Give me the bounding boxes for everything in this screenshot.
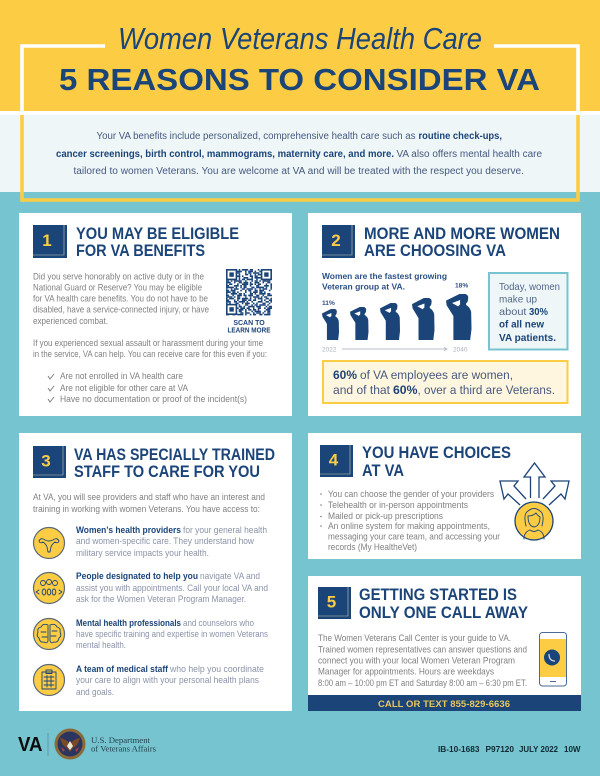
heading 4: AT VA bbox=[362, 461, 404, 480]
intro text: cancer screenings, birth control, mammograms, maternity care, and more. bbox=[56, 149, 394, 160]
sexual assault paragraph bbox=[33, 338, 267, 359]
number badge 4 bbox=[320, 445, 353, 477]
text: who help you coordinate bbox=[169, 663, 264, 674]
call center paragraph: connect you with your local Women Veteran Program bbox=[318, 656, 515, 666]
callout: 30% of new patients: 30% bbox=[529, 307, 548, 318]
title line: 5 Reasons to Consider VA: 5 REASONS TO CONSIDER VA bbox=[59, 62, 540, 97]
call center paragraph: The Women Veterans Call Center is your guide to VA. bbox=[318, 633, 511, 643]
callout: 30% of new patients: Today, women bbox=[499, 282, 560, 293]
text: ask for the Women Veteran Program Manager. bbox=[76, 593, 246, 604]
text: navigate VA and bbox=[200, 570, 260, 581]
icon: phone bbox=[540, 632, 566, 686]
panel 2: more women choosing VA bbox=[308, 213, 581, 416]
chart heading bbox=[322, 271, 447, 292]
staff intro text bbox=[33, 492, 265, 514]
footer: VA logo bbox=[18, 728, 156, 760]
heading 4: YOU HAVE CHOICES bbox=[362, 443, 511, 462]
eligibility paragraph: National Guard or Reserve? You may be eligible bbox=[33, 282, 202, 292]
call bar bbox=[308, 695, 581, 711]
text: military service impacts your health. bbox=[76, 547, 209, 558]
woman avatar bbox=[515, 502, 553, 540]
heading 1 bbox=[76, 224, 239, 260]
bullet list: An online system for making appointments, bbox=[328, 521, 490, 531]
department name: of Veterans Affairs bbox=[91, 744, 156, 754]
panel 4: choices at VA bbox=[308, 433, 581, 559]
number badge 3 bbox=[33, 446, 66, 478]
text: assist you with appointments. Call your local VA and bbox=[76, 582, 268, 593]
label 11%: 11% bbox=[322, 300, 335, 307]
department name: U.S. Department bbox=[91, 735, 151, 745]
intro text: routine check-ups, bbox=[418, 131, 502, 142]
panel 5: getting started bbox=[308, 576, 581, 711]
callout: 60% of employees: 60% bbox=[333, 368, 357, 382]
text: have specific training and expertise in women Veterans bbox=[76, 628, 268, 639]
heading 1: YOU MAY BE ELIGIBLE bbox=[76, 224, 239, 243]
arrows bbox=[500, 463, 569, 505]
callout: 60% of employees: of VA employees are women, bbox=[360, 368, 513, 382]
text: Mental health professionals bbox=[76, 617, 181, 628]
department seal bbox=[54, 728, 86, 760]
callout: 60% of employees: and of that bbox=[333, 383, 391, 397]
axis start year: 2022 bbox=[322, 346, 337, 354]
heading 3: VA HAS SPECIALLY TRAINED bbox=[74, 445, 275, 464]
number badge 5 bbox=[318, 587, 351, 619]
frame: yellow lower part bbox=[22, 115, 578, 200]
callout: 30% of new patients: VA patients. bbox=[499, 333, 556, 344]
bullet list bbox=[320, 489, 500, 552]
footer: publication code: 10W bbox=[564, 745, 581, 754]
text: your care to align with your personal health plans bbox=[76, 674, 259, 685]
footer: publication code: JULY 2022 bbox=[519, 745, 559, 754]
callout: 30% of new patients: about bbox=[499, 307, 527, 318]
callout: 30% of new patients: make up bbox=[499, 295, 537, 306]
call center paragraph: Trained women representatives can answer questions and bbox=[318, 644, 527, 654]
staff intro text: At VA, you will see providers and staff who have an interest and bbox=[33, 492, 265, 502]
eligibility paragraph: experienced combat. bbox=[33, 316, 108, 326]
text: and counselors who bbox=[183, 617, 254, 628]
item: people designated to help bbox=[34, 570, 268, 604]
title line: Women Veterans Health Care: Women Veterans Health Care bbox=[118, 21, 482, 56]
checklist: Are not enrolled in VA health care bbox=[60, 371, 183, 381]
number badge 1: 1 bbox=[42, 231, 52, 250]
call center paragraph: 8:00 am – 10:00 pm ET and Saturday 8:00 am – 6:30 pm ET. bbox=[318, 678, 527, 688]
intro text bbox=[56, 131, 542, 177]
frame: white upper part bbox=[22, 46, 578, 113]
QR caption: LEARN MORE bbox=[228, 328, 271, 334]
call center paragraph: Manager for appointments. Hours are weekdays bbox=[318, 666, 494, 676]
icon: people bbox=[34, 572, 64, 604]
heading 4 bbox=[362, 443, 511, 480]
heading 5: GETTING STARTED IS bbox=[359, 585, 517, 604]
heading 2: ARE CHOOSING VA bbox=[364, 241, 506, 260]
heading 1: FOR VA BENEFITS bbox=[76, 241, 205, 260]
intro text: tailored to women Veterans. You are welcome at VA and will be treated with the respect you deserve. bbox=[74, 166, 524, 177]
call bar: CALL OR TEXT 855-829-6636 bbox=[378, 699, 510, 710]
panel 3: specially trained staff bbox=[19, 433, 292, 711]
QR code bbox=[226, 270, 272, 315]
icon: uterus bbox=[34, 528, 64, 558]
bullet list: messaging your care team, and accessing your bbox=[328, 532, 500, 542]
callout: 30% of new patients: of all new bbox=[499, 320, 545, 331]
text bbox=[76, 524, 267, 558]
number badge 3: 3 bbox=[41, 452, 51, 470]
chart heading: Veteran group at VA. bbox=[322, 282, 405, 292]
eligibility paragraph: for VA health care benefits. You do not have to be bbox=[33, 294, 208, 304]
item: women's health providers bbox=[34, 524, 267, 558]
icon: brain bbox=[34, 618, 64, 650]
text bbox=[76, 570, 268, 604]
number badge 2 bbox=[322, 225, 355, 258]
department name bbox=[91, 735, 156, 754]
eligibility paragraph: Did you serve honorably on active duty or in the bbox=[33, 272, 204, 282]
heading 2: MORE AND MORE WOMEN bbox=[364, 224, 560, 243]
intro band: pale bbox=[0, 111, 600, 192]
number badge 1 bbox=[33, 225, 67, 258]
header divider: white bbox=[0, 111, 600, 115]
item: team of medical staff bbox=[34, 663, 264, 697]
text bbox=[76, 663, 264, 697]
VA wordmark: VA bbox=[18, 734, 42, 756]
heading 5: ONLY ONE CALL AWAY bbox=[359, 603, 528, 622]
number badge 4: 4 bbox=[329, 450, 339, 470]
checklist: Have no documentation or proof of the incident(s) bbox=[60, 394, 247, 404]
bullet list: records (My HealtheVet) bbox=[328, 542, 417, 552]
call center paragraph bbox=[318, 633, 527, 688]
text: and goals. bbox=[76, 686, 114, 697]
icon: choice arrows and woman bbox=[500, 463, 569, 540]
heading 3: STAFF TO CARE FOR YOU bbox=[74, 462, 260, 481]
logo divider bbox=[47, 733, 49, 756]
text: People designated to help you bbox=[76, 570, 198, 581]
eligibility paragraph bbox=[33, 272, 209, 326]
icon: clipboard bbox=[34, 664, 64, 696]
bullet list: You can choose the gender of your providers bbox=[328, 489, 494, 499]
callout: 60% of employees bbox=[323, 361, 568, 403]
bullet list: Telehealth or in-person appointments bbox=[328, 500, 468, 510]
axis arrow bbox=[342, 347, 447, 351]
intro text: Your VA benefits include personalized, comprehensive health care such as bbox=[96, 131, 416, 142]
sexual assault paragraph: in the service, VA can help. You can receive care for this even if you: bbox=[33, 349, 267, 359]
axis end year: 2040 bbox=[453, 346, 468, 354]
header band: yellow bbox=[0, 0, 600, 111]
QR caption: SCAN TO bbox=[233, 320, 265, 327]
number badge 5: 5 bbox=[327, 592, 336, 612]
text: and women-specific care. They understand how bbox=[76, 535, 254, 546]
heading 5 bbox=[359, 585, 528, 622]
label 18%: 18% bbox=[455, 282, 468, 290]
number badge 2: 2 bbox=[331, 231, 341, 250]
item: mental health professionals bbox=[34, 617, 268, 650]
footer: publication code bbox=[438, 745, 581, 754]
text: A team of medical staff bbox=[76, 663, 169, 674]
footer: publication code: IB-10-1683 bbox=[438, 745, 480, 754]
footer: publication code: P97120 bbox=[486, 745, 515, 754]
text: Women’s health providers bbox=[76, 524, 181, 535]
eligibility paragraph: disabled, have a service-connected injury, or have bbox=[33, 304, 209, 314]
checklist: Are not eligible for other care at VA bbox=[60, 383, 189, 393]
title bbox=[59, 21, 540, 97]
text bbox=[76, 617, 268, 650]
callout: 60% of employees: 60% bbox=[393, 383, 418, 397]
QR caption bbox=[228, 320, 271, 334]
text: for your general health bbox=[183, 524, 267, 535]
panel 1: eligibility bbox=[19, 213, 292, 416]
chart: saluting silhouettes 2022 to 2040 bbox=[322, 282, 472, 354]
callout: 60% of employees: , over a third are Veterans. bbox=[418, 383, 555, 397]
chart heading: Women are the fastest growing bbox=[322, 271, 447, 281]
heading 2 bbox=[364, 224, 560, 260]
bullet list: Mailed or pick-up prescriptions bbox=[328, 511, 443, 521]
text: mental health. bbox=[76, 639, 126, 650]
sexual assault paragraph: If you experienced sexual assault or harassment during your time bbox=[33, 338, 263, 348]
heading 3 bbox=[74, 445, 275, 481]
staff intro text: training in working with women Veterans. You have access to: bbox=[33, 504, 260, 514]
intro text: VA also offers mental health care bbox=[396, 149, 542, 160]
checklist bbox=[48, 371, 247, 404]
callout: 30% of new patients bbox=[489, 273, 568, 350]
